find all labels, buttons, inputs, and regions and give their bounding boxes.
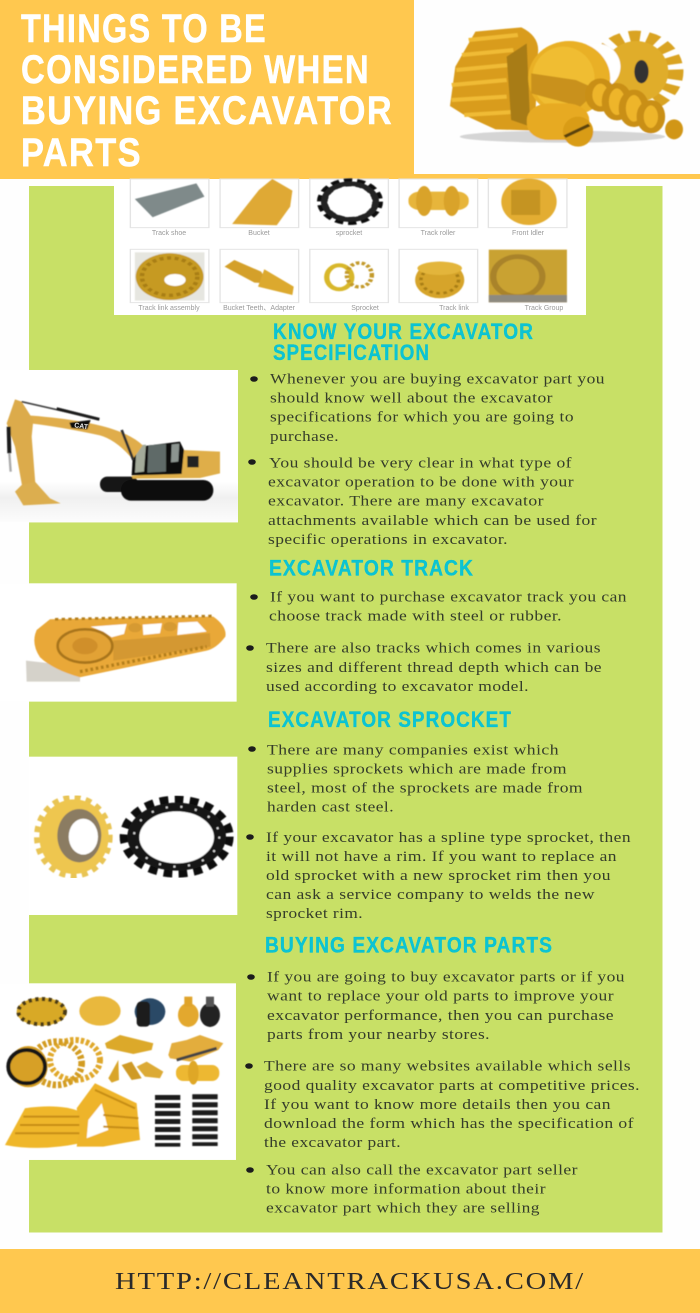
bullet text: excavator performance, then you can purchase [267, 1008, 614, 1024]
bullet text: excavator part which they are selling [266, 1200, 540, 1216]
bullet text: You can also call the excavator part seller [266, 1162, 578, 1178]
title [21, 7, 393, 175]
image: excavator [0, 370, 238, 522]
catalogue labels: Bucket Teeth、Adapter [223, 305, 296, 312]
section: know your excavator specification [248, 319, 605, 548]
bullet text: Whenever you are buying excavator part you [270, 372, 605, 388]
bullet text: You should be very clear in what type of [269, 456, 572, 472]
bullet text: download the form which has the specification of [264, 1116, 634, 1132]
catalogue labels: Track link [439, 305, 469, 312]
image: excavator undercarriage parts group [450, 27, 683, 147]
catalogue labels: Track roller [421, 230, 456, 237]
catalogue labels: Track link assembly [138, 305, 200, 312]
bullet text: parts from your nearby stores. [267, 1027, 490, 1043]
thumb: sprocket [322, 182, 378, 221]
title: THINGS TO BE [21, 7, 267, 51]
bullet text: There are many companies exist which [267, 742, 559, 758]
bullet text: good quality excavator parts at competitive prices. [264, 1078, 640, 1094]
thumb: track group [489, 250, 567, 302]
title: CONSIDERED WHEN [21, 48, 370, 92]
bullet text: to know more information about their [266, 1182, 546, 1198]
thumb: track shoe [135, 183, 204, 217]
bullet text: sizes and different thread depth which can be [266, 660, 602, 676]
bullet text: purchase. [270, 429, 339, 445]
green content panel [29, 186, 662, 1232]
CAT label: CAT [74, 422, 89, 431]
bullet text: If your excavator has a spline type sprocket, then [266, 830, 631, 846]
section: excavator sprocket [246, 707, 631, 922]
thumb: track link assembly [135, 252, 204, 301]
bullet text: attachments available which can be used for [268, 513, 597, 529]
heading: EXCAVATOR TRACK [269, 556, 474, 580]
bullet text: want to replace your old parts to improve your [267, 988, 614, 1004]
bullet text: can ask a service company to welds the new [266, 887, 595, 903]
thumb: bucket [232, 179, 292, 225]
heading: BUYING EXCAVATOR PARTS [265, 932, 553, 958]
catalogue labels: Bucket [248, 230, 270, 237]
bullet text: There are so many websites available which sells [264, 1058, 631, 1074]
catalogue labels: Sprocket [351, 305, 379, 312]
bullet text [245, 970, 640, 1216]
section: excavator track [246, 556, 627, 695]
bullet text: excavator. There are many excavator [268, 494, 544, 510]
bullet text: it will not have a rim. If you want to replace an [266, 849, 617, 865]
thumb: bucket teeth [225, 260, 268, 283]
image: parts catalogue grid [114, 178, 586, 315]
bullet text: should know well about the excavator [270, 390, 553, 406]
section: buying excavator parts [245, 932, 640, 1216]
title: BUYING EXCAVATOR [21, 89, 393, 133]
bullet text: old sprocket with a new sprocket rim then you [266, 868, 611, 884]
bullet text: If you want to purchase excavator track you can [270, 590, 627, 606]
heading [273, 319, 534, 365]
catalogue labels: sprocket [336, 230, 362, 237]
bullet text: used according to excavator model. [266, 679, 529, 695]
bullet text: sprocket rim. [266, 906, 363, 922]
thumb: track link [415, 262, 464, 298]
bullet text: the excavator part. [264, 1135, 401, 1151]
thumb: track roller [408, 192, 469, 210]
bullet text: choose track made with steel or rubber. [269, 608, 562, 624]
heading: SPECIFICATION [273, 340, 430, 365]
catalogue labels [138, 230, 563, 312]
bullet text: specifications for which you are going to [270, 410, 574, 426]
bullet text: specific operations in excavator. [268, 532, 508, 548]
bullet text [248, 372, 605, 548]
bullet text: supplies sprockets which are made from [267, 762, 567, 778]
header banner [0, 0, 700, 179]
bullet text [246, 742, 631, 922]
heading: EXCAVATOR SPROCKET [268, 707, 512, 732]
heading: KNOW YOUR EXCAVATOR [273, 319, 534, 344]
catalogue labels: Track shoe [152, 230, 186, 237]
bullet text: If you are going to buy excavator parts or if you [267, 970, 625, 986]
catalogue labels: Front Idler [512, 230, 545, 237]
image: excavator track [0, 583, 237, 702]
bullet text: excavator operation to be done with your [268, 474, 574, 490]
thumb: front idler [501, 178, 557, 225]
bullet text: harden cast steel. [267, 800, 394, 816]
bullet text: steel, most of the sprockets are made from [267, 780, 583, 796]
website url: HTTP://CLEANTRACKUSA.COM/ [115, 1269, 585, 1295]
image: excavator sprockets [29, 757, 237, 915]
image: assorted excavator parts [0, 983, 236, 1160]
bullet text: There are also tracks which comes in various [266, 640, 601, 656]
thumb: small sprocket [327, 265, 352, 289]
bullet text: If you want to know more details then you can [264, 1097, 611, 1113]
bullet text [246, 590, 627, 695]
catalogue labels: Track Group [525, 305, 563, 312]
title: PARTS [21, 131, 142, 175]
footer bar [0, 1249, 700, 1313]
